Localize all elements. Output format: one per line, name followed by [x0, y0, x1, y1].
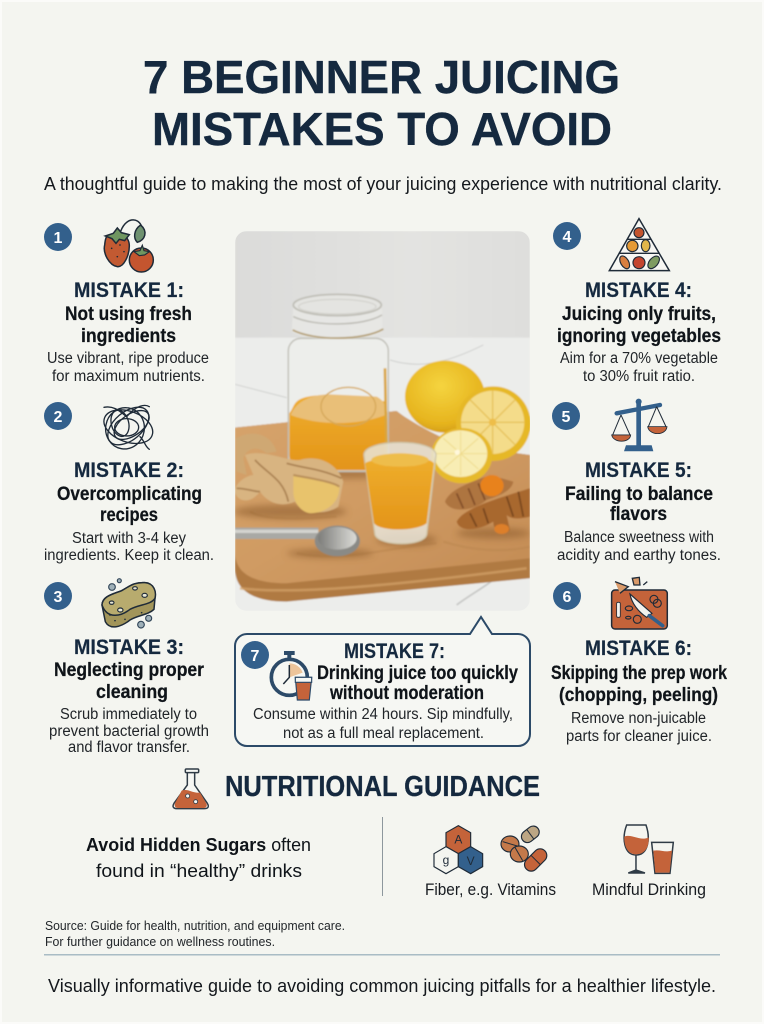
- title text: [557, 304, 721, 347]
- spoon: [235, 528, 318, 539]
- title text: flavors: [610, 504, 667, 525]
- panel: mistake 7 callout: [235, 617, 530, 746]
- badge 2: 2: [54, 409, 63, 426]
- title text: [65, 304, 192, 347]
- panel: mistake 2: [44, 400, 214, 564]
- badge 3: 3: [54, 589, 63, 606]
- icon: vitamin hexagons and pills: V: [467, 854, 475, 868]
- icon: wine glass and juice glass: [624, 825, 673, 873]
- badge 1: 1: [54, 230, 63, 247]
- description: [560, 350, 718, 385]
- title text: ignoring vegetables: [557, 326, 721, 347]
- lemons: [405, 361, 485, 433]
- description: [557, 529, 721, 564]
- label: fiber and vitamins: Fiber, e.g. Vitamins: [425, 880, 556, 899]
- badge 4: [553, 222, 581, 250]
- description: Start with 3-4 key: [72, 530, 186, 547]
- label: mindful drinking: Mindful Drinking: [592, 880, 706, 899]
- description: [566, 710, 712, 745]
- title text: Skipping the prep work: [551, 663, 727, 684]
- icon: food pyramid: [609, 219, 669, 271]
- description: [47, 350, 209, 385]
- title text: Not using fresh: [65, 304, 192, 325]
- icon: strawberry and tomato: [104, 220, 153, 272]
- icon: stopwatch and juice glass: [271, 651, 312, 700]
- title text: Failing to balance: [565, 484, 713, 505]
- icon: vitamin hexagons and pills: A: [454, 832, 462, 846]
- heading: MISTAKE 6:: [585, 636, 692, 660]
- description: [49, 706, 209, 756]
- badge 5: 5: [562, 409, 571, 426]
- description: parts for cleaner juice.: [566, 728, 712, 745]
- description: to 30% fruit ratio.: [583, 368, 695, 385]
- title text: [317, 663, 518, 704]
- description: for maximum nutrients.: [52, 368, 205, 385]
- title text: [54, 660, 205, 703]
- badge 3: [44, 582, 72, 610]
- description: Use vibrant, ripe produce: [47, 350, 209, 367]
- shot glass: [364, 442, 436, 544]
- heading: MISTAKE 4:: [585, 278, 692, 302]
- panel: mistake 6: [551, 577, 727, 745]
- icon: flask: [173, 769, 208, 809]
- title text: (chopping, peeling): [559, 685, 718, 706]
- subtitle: A thoughtful guide to making the most of your juicing experience with nutritional clarity.: [44, 173, 722, 194]
- icon: vitamin hexagons and pills: [434, 824, 550, 874]
- panel: mistake 3: [44, 579, 209, 756]
- panel: mistake 4: [553, 219, 721, 385]
- text: avoid hidden sugars: [86, 834, 311, 881]
- object shadows: [233, 468, 530, 558]
- jar: [288, 338, 388, 472]
- description: Balance sweetness with: [564, 529, 714, 546]
- ginger: [236, 434, 277, 475]
- title text: without moderation: [329, 683, 484, 704]
- description: acidity and earthy tones.: [557, 547, 721, 564]
- heading: MISTAKE 3:: [74, 635, 184, 659]
- description: prevent bacterial growth: [49, 723, 209, 740]
- source note: For further guidance on wellness routines.: [45, 935, 275, 949]
- heading: nutritional guidance: NUTRITIONAL GUIDANCE: [225, 771, 540, 803]
- footer text: Visually informative guide to avoiding common juicing pitfalls for a healthier lifestyle.: [48, 975, 716, 996]
- badge 7: [241, 641, 269, 669]
- description: Aim for a 70% vegetable: [560, 350, 718, 367]
- icon: vitamin hexagons and pills: g: [443, 853, 449, 867]
- panel: mistake 1: [44, 220, 209, 385]
- title text: ingredients: [81, 326, 176, 347]
- title text: [565, 484, 713, 525]
- description: Remove non-juicable: [571, 710, 706, 727]
- heading: MISTAKE 2:: [74, 458, 184, 482]
- icon: balance scale: [612, 399, 667, 451]
- panel: mistake 5: [552, 399, 721, 564]
- source note: [45, 919, 345, 949]
- description: Scrub immediately to: [60, 706, 197, 723]
- description: and flavor transfer.: [68, 739, 190, 756]
- badge 1: [44, 223, 72, 251]
- title text: [57, 484, 202, 526]
- badge 6: [553, 582, 581, 610]
- icon: cutting board with knife: [612, 577, 667, 629]
- title text: [551, 663, 727, 706]
- turmeric: [445, 475, 513, 510]
- description: not as a full meal replacement.: [283, 725, 484, 742]
- badge 5: [552, 402, 580, 430]
- badge 7: 7: [251, 648, 260, 665]
- title text: Overcomplicating: [57, 484, 202, 505]
- badge 6: 6: [563, 589, 572, 606]
- description: [44, 530, 214, 564]
- callout box with pointer: [235, 617, 530, 746]
- title text: cleaning: [96, 682, 168, 703]
- title text: Neglecting proper: [54, 660, 205, 681]
- heading: MISTAKE 1:: [74, 278, 184, 302]
- description: [253, 706, 513, 742]
- heading: MISTAKE 5:: [585, 458, 692, 482]
- title: [143, 51, 620, 155]
- title text: Juicing only fruits,: [562, 304, 716, 325]
- heading: MISTAKE 7:: [344, 639, 445, 663]
- badge 2: [44, 402, 72, 430]
- description: ingredients. Keep it clean.: [44, 547, 214, 564]
- title text: recipes: [100, 505, 158, 526]
- source note: Source: Guide for health, nutrition, and equipment care.: [45, 919, 345, 933]
- text: avoid hidden sugars: Avoid Hidden Sugars often: [86, 834, 311, 855]
- title: 7 BEGINNER JUICING: [143, 51, 620, 103]
- board: [235, 411, 530, 602]
- badge 4: 4: [563, 229, 572, 246]
- photo: jar of juice with lemon, ginger and turmeric on a board: [233, 231, 531, 611]
- title text: Drinking juice too quickly: [317, 663, 518, 684]
- icon: tangled scribble: [99, 400, 157, 452]
- description: Consume within 24 hours. Sip mindfully,: [253, 706, 513, 723]
- text: avoid hidden sugars: found in “healthy” drinks: [96, 860, 302, 881]
- icon: sponge with bubbles: [102, 579, 155, 628]
- title: MISTAKES TO AVOID: [152, 103, 612, 155]
